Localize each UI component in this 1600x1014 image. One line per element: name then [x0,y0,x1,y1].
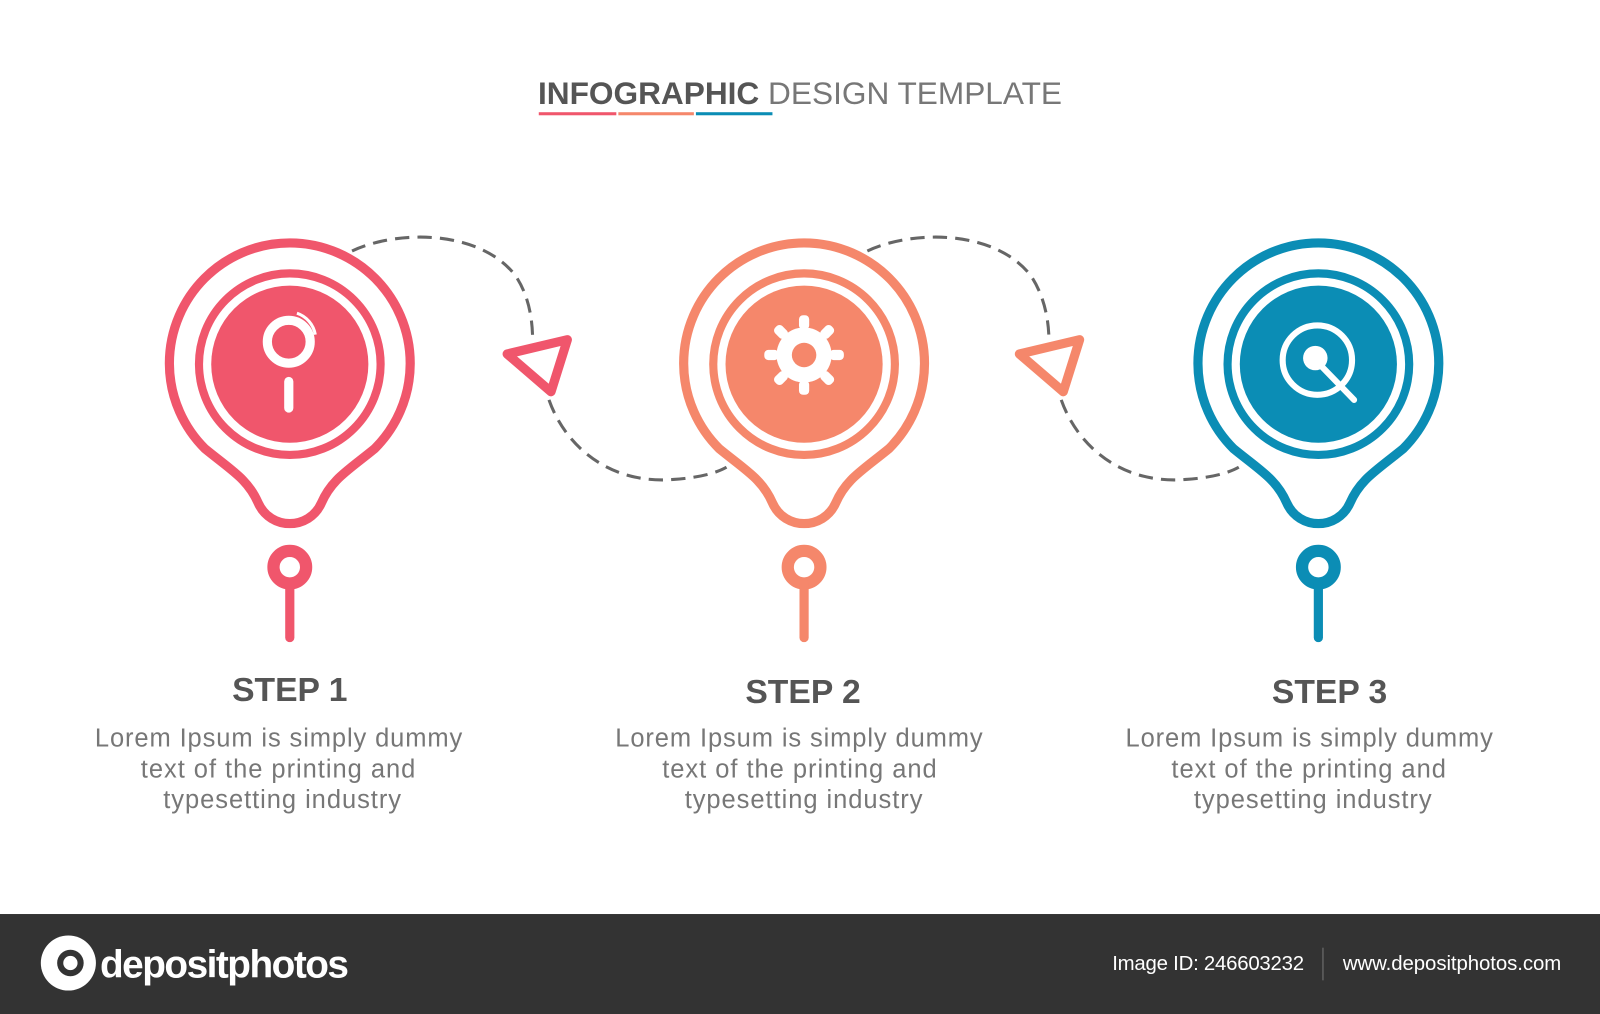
arrow: triangle 1 [507,340,567,392]
arrow: dashed connector 2 [867,237,1239,480]
icon: camera logo [41,935,96,991]
text block: step 3: Lorem Ipsum is simply dummy [1126,725,1493,753]
text block: step 3: text of the printing and [1171,755,1446,783]
pin: step 1 [169,243,410,638]
text block: step 3: STEP 3 [1272,674,1387,711]
text block: step 3 [1126,674,1493,814]
text block: step 2: STEP 2 [745,674,861,711]
text block: step 1: typesetting industry [163,786,401,814]
text block: step 1: STEP 1 [232,672,347,709]
text block: step 1: text of the printing and [141,755,415,783]
text block: step 2: Lorem Ipsum is simply dummy [615,725,983,753]
text block: step 3: typesetting industry [1194,786,1432,814]
pin: step 3 [1198,243,1439,638]
footer bar: depositphotos [100,943,348,986]
arrow: dashed connector 1 [352,237,727,480]
arrow: triangle 2 [1019,340,1080,392]
icon: gear [764,315,844,395]
text block: step 1: Lorem Ipsum is simply dummy [95,725,462,753]
text block: step 2: typesetting industry [685,786,923,814]
footer bar: www.depositphotos.com [1342,953,1561,975]
footer bar [0,914,1600,1014]
title: INFOGRAPHIC DESIGN TEMPLATE [538,75,1062,111]
text block: step 2 [615,674,983,814]
icon: target search [1283,325,1354,400]
text block: step 1 [95,672,462,814]
icon: magnifier [267,313,315,408]
pin: step 2 [684,243,924,638]
footer bar: Image ID: 246603232 [1112,953,1304,975]
text block: step 2: text of the printing and [662,755,937,783]
